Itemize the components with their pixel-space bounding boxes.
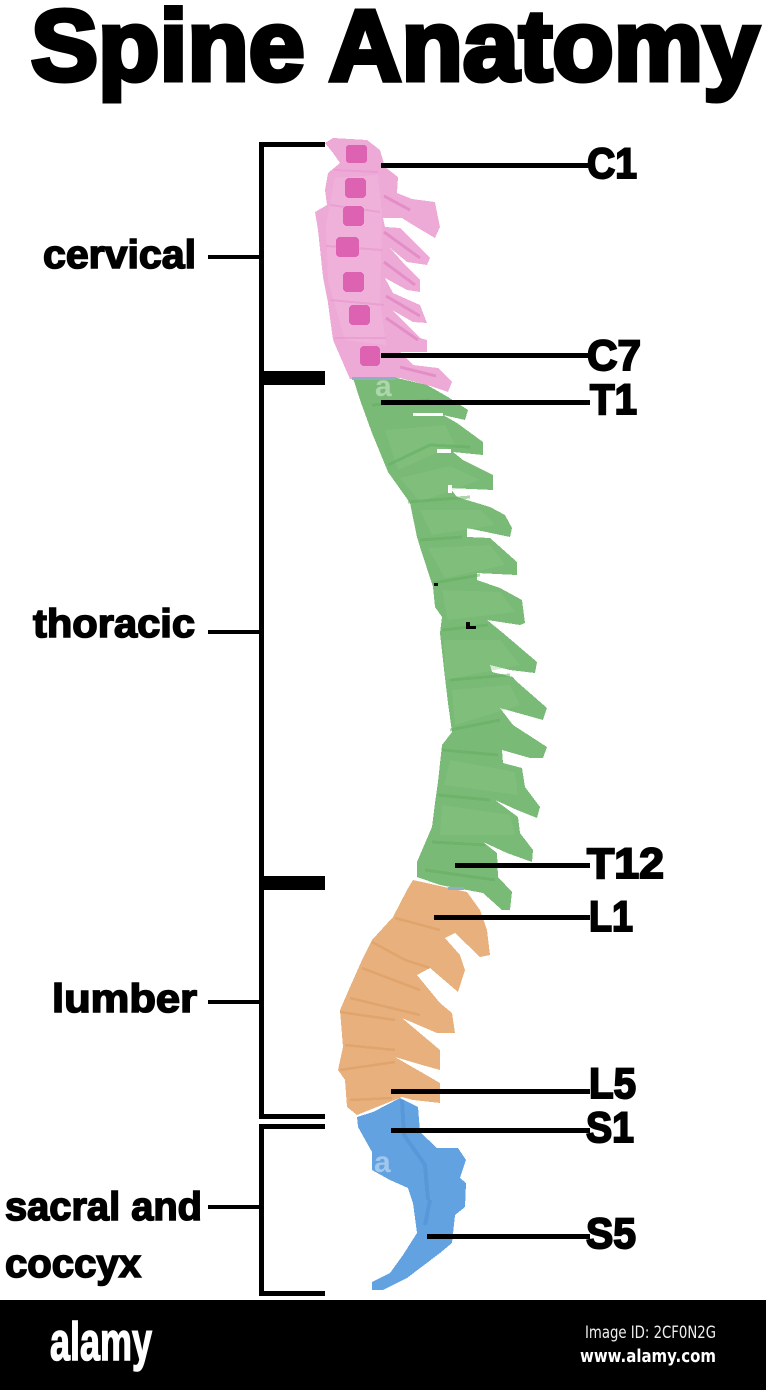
footer logo: alamy xyxy=(50,1312,152,1372)
label: L1: L1 xyxy=(589,893,633,941)
cervical vertebrae xyxy=(315,138,452,392)
label: cervical: cervical xyxy=(43,233,196,277)
label: lumber: lumber xyxy=(52,977,197,1021)
label: L5: L5 xyxy=(589,1060,636,1108)
label: S5: S5 xyxy=(586,1210,636,1258)
label: coccyx: coccyx xyxy=(5,1242,141,1286)
label: thoracic: thoracic xyxy=(33,602,195,646)
black specks xyxy=(434,583,476,629)
footer image id: Image ID: 2CF0N2G xyxy=(585,1323,716,1343)
label: C1: C1 xyxy=(587,140,637,188)
region brackets xyxy=(208,142,325,1296)
watermark letters: a xyxy=(374,1146,391,1179)
thoracic vertebrae xyxy=(353,378,547,910)
vertebra holes xyxy=(336,145,380,366)
footer bar xyxy=(0,1300,766,1390)
label: S1: S1 xyxy=(586,1104,634,1152)
label: T12: T12 xyxy=(587,840,664,888)
lumbar vertebrae xyxy=(338,880,490,1115)
sacrum and coccyx xyxy=(357,1098,466,1290)
leader lines xyxy=(381,163,590,1239)
label: T1: T1 xyxy=(590,376,637,424)
region boundary tints xyxy=(352,377,464,890)
label: sacral and: sacral and xyxy=(5,1185,202,1229)
footer url: www.alamy.com xyxy=(580,1346,716,1367)
label: C7: C7 xyxy=(587,332,641,380)
watermark letters xyxy=(374,370,392,1179)
small gaps between spines xyxy=(413,413,452,493)
watermark letters: a xyxy=(375,370,392,403)
